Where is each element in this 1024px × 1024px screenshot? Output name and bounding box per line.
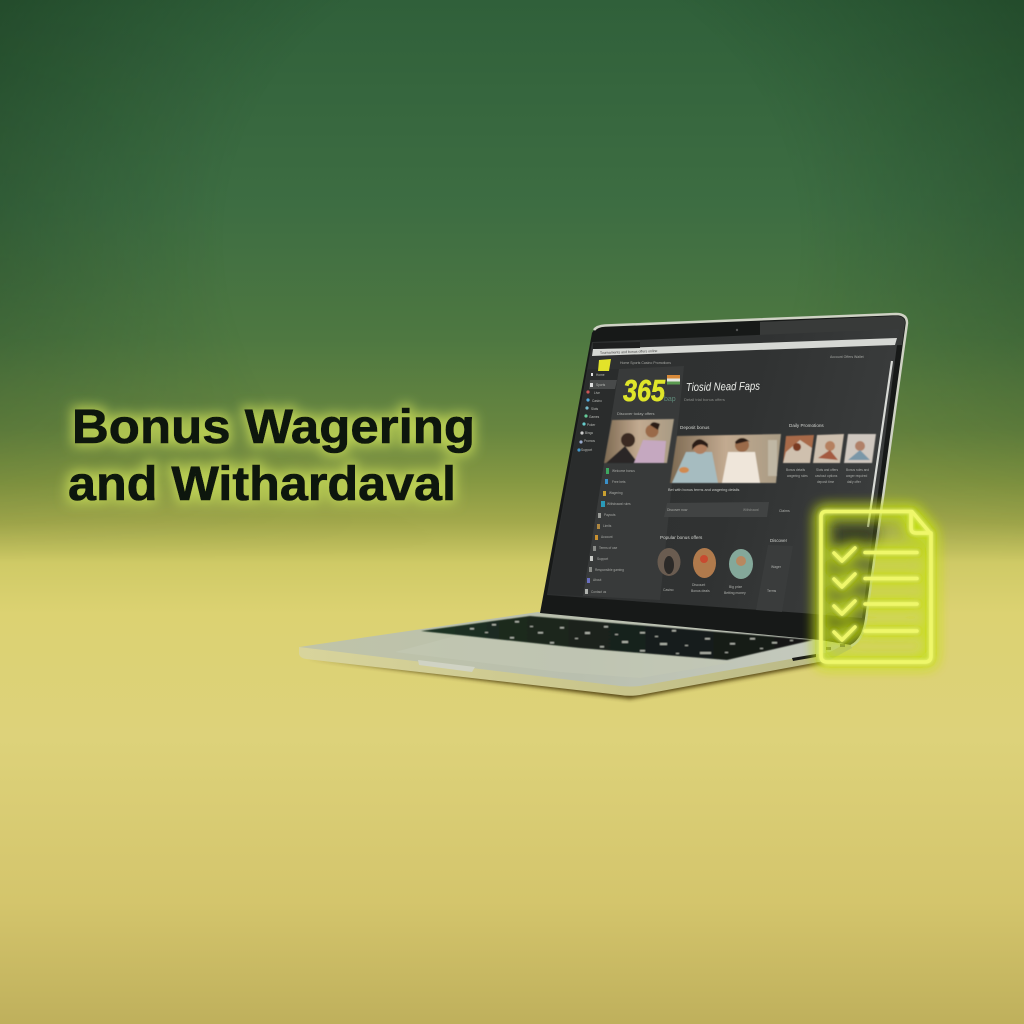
brand logo 365: Discover today offers [617, 411, 654, 416]
sidebar panels: Home [596, 373, 605, 377]
section label and avatars: Discover [770, 538, 788, 543]
thumbnail captions: cashout options [815, 474, 838, 478]
section label and avatars: Terms [767, 589, 777, 593]
mini logo and nav [598, 355, 864, 371]
mini logo and nav: Home Sports Casino Promotions [620, 361, 671, 365]
left menu list: Free bets [612, 480, 626, 484]
browser bar: Tournaments and bonus offers online [600, 349, 658, 355]
brand logo 365: bap [664, 396, 676, 403]
sidebar panels: Slots [591, 407, 598, 411]
sidebar panels: Support [581, 448, 592, 452]
deposit row: Withdrawal [743, 508, 759, 512]
sidebar panels: Sports [596, 383, 606, 387]
left menu list: Terms of use [599, 546, 617, 550]
brand logo 365 [617, 373, 680, 416]
sidebar panels: Promos [584, 439, 595, 443]
heading on screen [680, 381, 824, 430]
title [68, 401, 475, 511]
screen [547, 329, 899, 618]
section label and avatars [658, 535, 793, 612]
brand logo 365: 365 [623, 373, 666, 408]
thumbnail captions: Slots and offers [816, 468, 838, 472]
sidebar panels: Live [594, 391, 600, 395]
laptop lid [540, 314, 907, 646]
left menu list: About [593, 578, 601, 582]
icon: neon checklist document [820, 511, 932, 674]
left menu list: Responsible gaming [595, 568, 624, 572]
section label and avatars: Discount [692, 583, 705, 587]
ports [826, 644, 845, 650]
laptop shadow [306, 658, 826, 699]
mini logo and nav: Account Offers Wallet [830, 355, 864, 359]
left menu list: Account [601, 535, 613, 539]
sidebar panels: Games [589, 415, 600, 419]
heading on screen: Detail trial bonus offers [684, 397, 725, 402]
left menu list: Contact us [591, 590, 607, 594]
left menu list: Payouts [604, 513, 616, 517]
section label and avatars: Big prize [729, 585, 742, 589]
left menu list: Support [597, 557, 608, 561]
thumbnail captions: Bonus rules and [846, 468, 869, 472]
deposit row [664, 488, 790, 517]
browser bar [592, 338, 897, 356]
sidebar panels: Poker [587, 423, 596, 427]
title: Bonus Wagering [72, 401, 475, 454]
title: and Withardaval [68, 458, 456, 511]
document shadow [822, 673, 932, 675]
left menu list: Limits [603, 524, 612, 528]
left menu list: Welcome bonus [612, 469, 635, 473]
section label and avatars: Popular bonus offers [660, 535, 703, 540]
laptop [299, 314, 907, 699]
heading on screen: Deposit bonus [680, 425, 710, 430]
thumbnail captions [786, 468, 869, 484]
thumbnail captions: daily offer [847, 480, 862, 484]
thumbnail captions: deposit time [817, 480, 834, 484]
sidebar panels [548, 366, 684, 600]
photo: left [604, 419, 674, 463]
deposit row: Claims [779, 509, 790, 513]
laptop base [299, 612, 852, 696]
photo thumbnails [783, 434, 876, 463]
section label and avatars: Betting money [724, 591, 746, 595]
section label and avatars: Bonus deals [691, 589, 710, 593]
heading on screen: Tiosid Nead Faps [686, 381, 760, 394]
thumbnail captions: wagering rules [787, 474, 808, 478]
sidebar panels: Casino [592, 399, 602, 403]
section label and avatars: Wager [771, 565, 782, 569]
heading on screen: Daily Promotions [789, 423, 824, 428]
document glass tint [820, 511, 932, 663]
left menu list [585, 468, 635, 594]
scrollbar [868, 361, 892, 527]
deposit row: Discover now [667, 508, 688, 512]
section label and avatars: Casino [663, 588, 674, 592]
thumbnail captions: Bonus details [786, 468, 806, 472]
deposit row: Bet with bonus terms and wagering details [668, 488, 739, 492]
left menu list: Wagering [609, 491, 623, 495]
left menu list: Withdrawal rules [607, 502, 631, 506]
thumbnail captions: wager required [846, 474, 867, 478]
photo: main [670, 434, 781, 483]
sidebar panels: Bingo [585, 431, 593, 435]
keyboard [421, 616, 813, 660]
neon shapes [821, 512, 931, 662]
